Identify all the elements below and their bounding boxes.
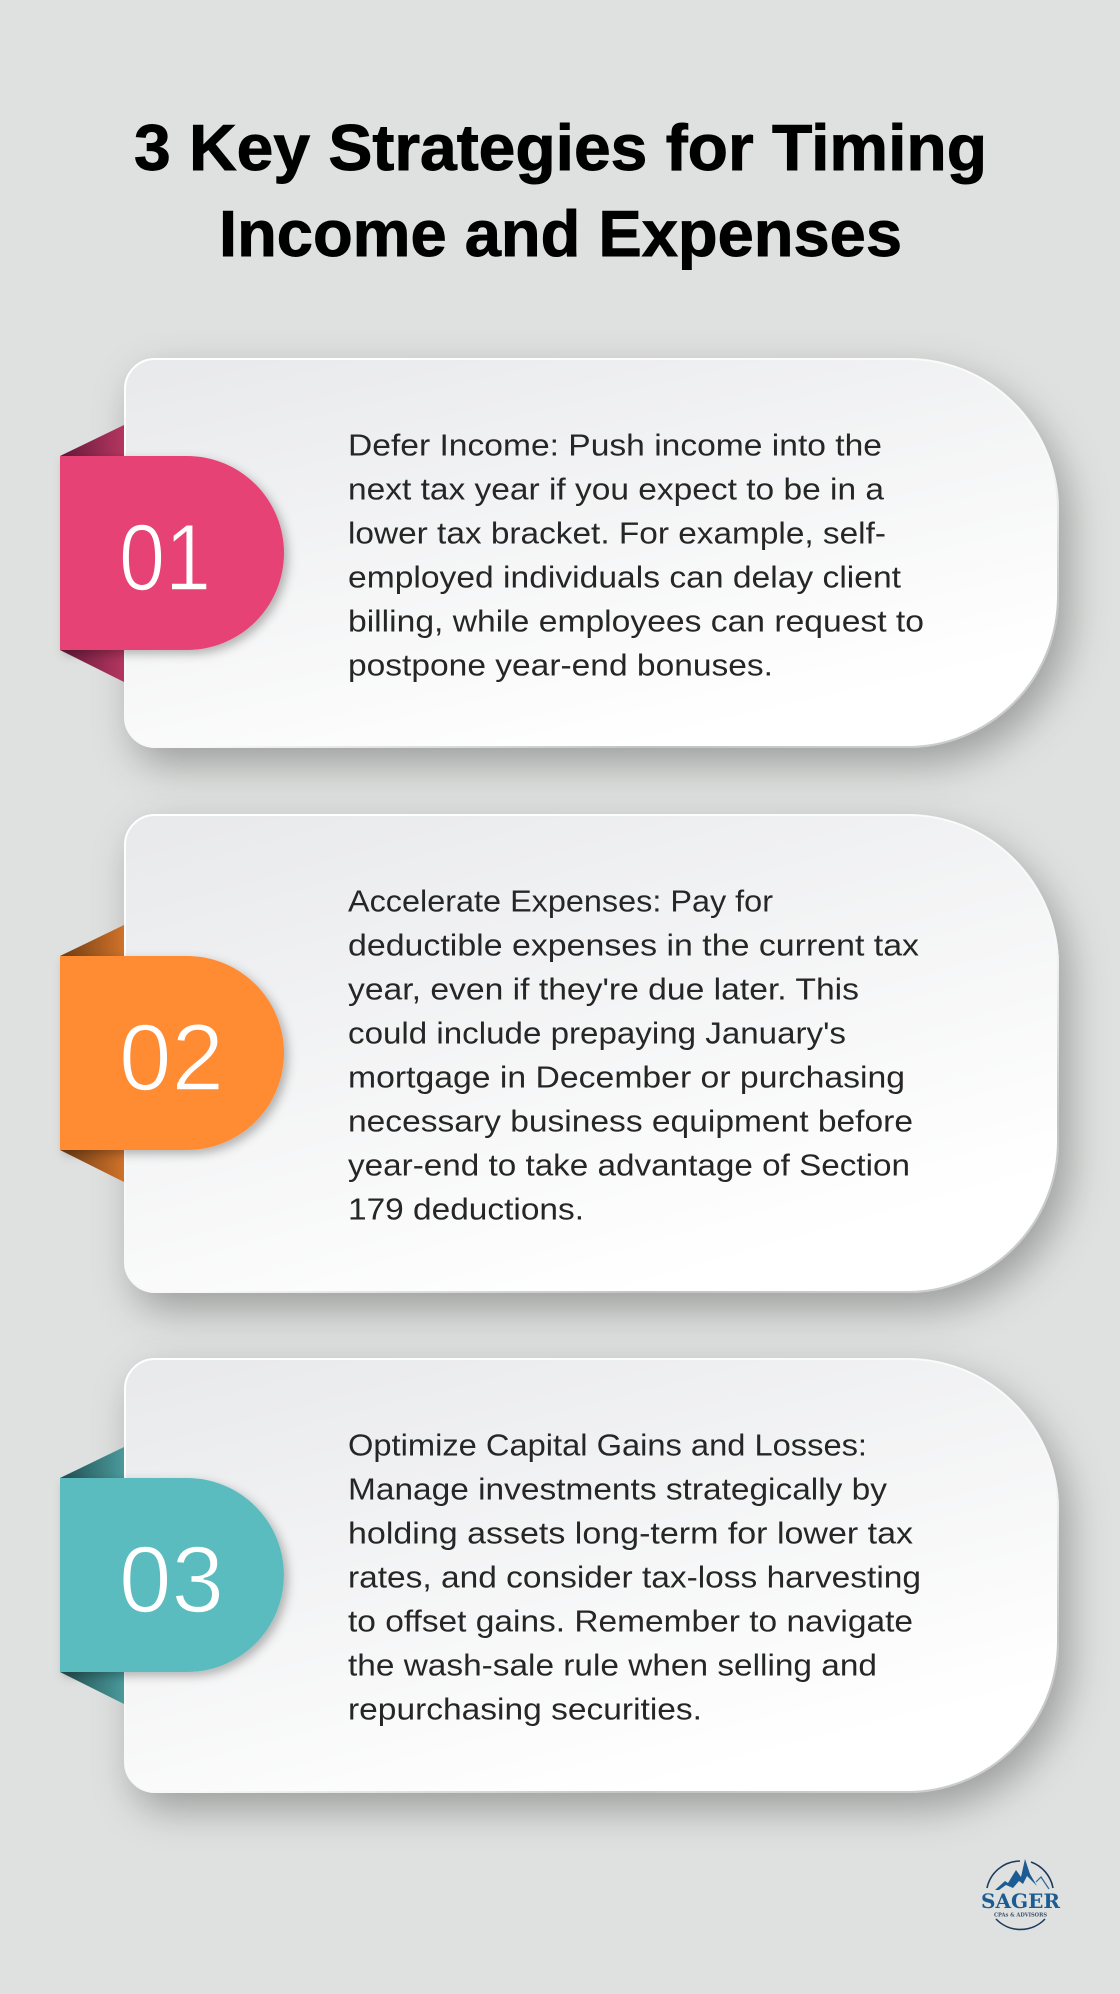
- text: accelerate expenses: mortgage in December or purchasing: [348, 1060, 905, 1094]
- number 03: 03: [119, 1527, 224, 1633]
- text: defer income: postpone year-end bonuses.: [348, 648, 773, 683]
- title: [134, 111, 987, 270]
- panel: strategy 3 optimize capital gains: [60, 1359, 1058, 1792]
- number 01: 01: [119, 505, 211, 611]
- text: accelerate expenses: deductible expenses in the current tax: [348, 928, 920, 963]
- logo ring arcs: [987, 1861, 1053, 1929]
- title: 3 Key Strategies for Timing: [134, 111, 987, 184]
- ribbon fold top 3: [60, 1447, 124, 1478]
- text: accelerate expenses: Accelerate Expenses: Pay for: [348, 884, 773, 919]
- number badge 1: [60, 456, 284, 650]
- text: optimize capital gains: repurchasing securities.: [348, 1692, 702, 1727]
- text: optimize capital gains: to offset gains. Remember to navigate: [348, 1604, 913, 1639]
- text: accelerate expenses: could include prepaying January's: [348, 1016, 846, 1050]
- ribbon fold top 2: [60, 925, 124, 956]
- text: defer income: [348, 428, 924, 683]
- logo tagline: CPAs & ADVISORS: [994, 1912, 1047, 1918]
- text: accelerate expenses: necessary business equipment before: [348, 1104, 913, 1138]
- text: accelerate expenses: year, even if they're due later. This: [348, 972, 859, 1007]
- ribbon fold bottom 2: [60, 1150, 124, 1182]
- card background 3: [125, 1359, 1058, 1792]
- text: accelerate expenses: 179 deductions.: [348, 1192, 584, 1226]
- panel: strategy 2 accelerate expenses: [60, 815, 1058, 1292]
- number badge 2: [60, 956, 284, 1150]
- logo mountain: [995, 1859, 1037, 1890]
- text: optimize capital gains: [348, 1428, 921, 1727]
- logo mountain ridge: [1036, 1877, 1049, 1889]
- text: defer income: next tax year if you expect to be in a: [348, 472, 885, 507]
- text: optimize capital gains: the wash-sale rule when selling and: [348, 1648, 877, 1683]
- logo: Sager CPAs and Advisors: [981, 1859, 1060, 1929]
- text: defer income: Defer Income: Push income into the: [348, 428, 882, 463]
- ribbon fold top 1: [60, 425, 124, 456]
- text: optimize capital gains: holding assets long-term for lower tax: [348, 1516, 914, 1551]
- card background 2: [125, 815, 1058, 1292]
- number 02: 02: [119, 1005, 224, 1111]
- text: optimize capital gains: Optimize Capital Gains and Losses:: [348, 1428, 867, 1463]
- text: accelerate expenses: [348, 884, 920, 1226]
- ribbon fold bottom 3: [60, 1672, 124, 1704]
- text: accelerate expenses: year-end to take advantage of Section: [348, 1148, 910, 1182]
- number badge 3: [60, 1478, 284, 1672]
- text: defer income: employed individuals can delay client: [348, 560, 901, 595]
- text: defer income: lower tax bracket. For example, self-: [348, 516, 886, 551]
- text: optimize capital gains: Manage investments strategically by: [348, 1472, 888, 1507]
- panel: strategy 1 defer income: [60, 359, 1058, 747]
- text: optimize capital gains: rates, and consider tax-loss harvesting: [348, 1560, 921, 1595]
- logo wordmark: SAGER: [981, 1889, 1060, 1913]
- card background 1: [125, 359, 1058, 747]
- ribbon fold bottom 1: [60, 650, 124, 682]
- text: defer income: billing, while employees can request to: [348, 604, 924, 639]
- title: Income and Expenses: [219, 197, 902, 270]
